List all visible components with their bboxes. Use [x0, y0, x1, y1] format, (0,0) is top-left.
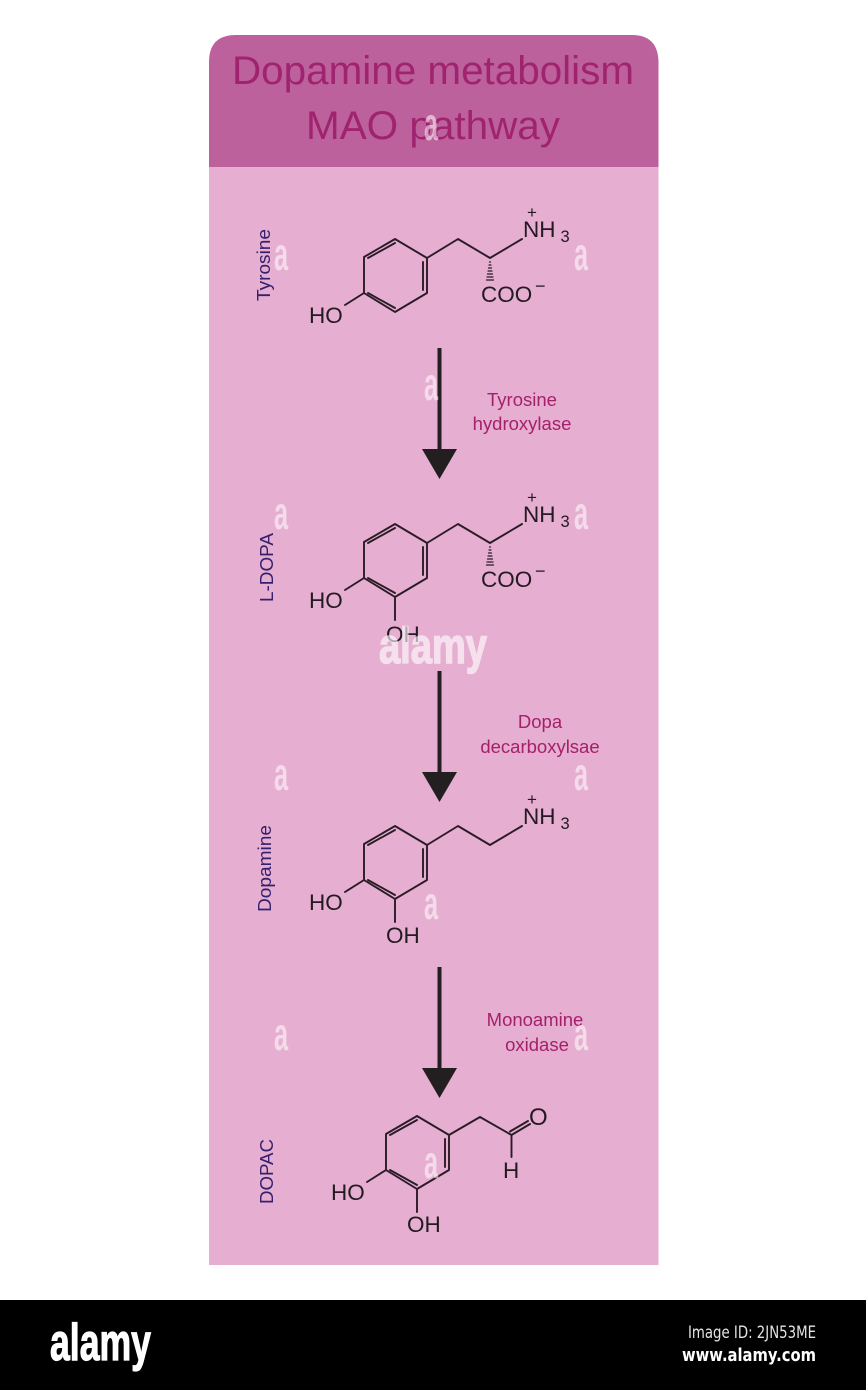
label: L-DOPA: L-DOPA: [256, 532, 277, 602]
footer image id: Image ID: 2JN53ME: [688, 1323, 816, 1343]
arrow 2: [422, 671, 457, 802]
molecule: Tyrosine: +: [527, 203, 537, 222]
enzyme: Monoamine oxidase: [487, 1009, 583, 1055]
watermark marks: a: [274, 748, 288, 800]
molecule: L-DOPA: HO: [309, 588, 343, 613]
molecule: Tyrosine: HO: [309, 303, 343, 328]
molecule: L-DOPA: −: [535, 561, 546, 581]
watermark marks: a: [424, 358, 438, 410]
molecule: L-DOPA: +: [527, 488, 537, 507]
label: Dopamine: Dopamine: [254, 825, 275, 912]
watermark marks: a: [574, 1008, 588, 1060]
header band: [209, 35, 658, 167]
watermark marks: a: [274, 228, 288, 280]
watermark marks: a: [574, 487, 588, 539]
enzyme: Tyrosine hydroxylase: Tyrosine: [487, 389, 557, 410]
enzyme: Tyrosine hydroxylase: hydroxylase: [473, 413, 571, 434]
enzyme: Tyrosine hydroxylase: [473, 389, 571, 434]
arrow 1: [422, 348, 457, 479]
watermark: alamy: alamy: [379, 618, 487, 674]
molecule: L-DOPA: OH: [386, 622, 420, 647]
watermark marks: a: [574, 228, 588, 280]
watermark marks: a: [574, 748, 588, 800]
molecule: Tyrosine: NH: [523, 217, 556, 242]
label: Tyrosine: Tyrosine: [253, 229, 274, 301]
molecule: DOPAC: [331, 1104, 548, 1237]
molecule: Tyrosine: COO: [481, 282, 532, 307]
watermark marks: a: [424, 877, 438, 929]
enzyme: Dopa decarboxylase: decarboxylsae: [480, 736, 600, 757]
enzyme: Monoamine oxidase: Monoamine: [487, 1009, 583, 1030]
molecule: Tyrosine: [309, 203, 570, 328]
molecule: Tyrosine: 3: [560, 228, 570, 246]
molecule: Dopamine: +: [527, 790, 537, 809]
watermark marks: [274, 98, 588, 1188]
molecule: DOPAC: OH: [407, 1212, 441, 1237]
molecule: DOPAC: HO: [331, 1180, 365, 1205]
watermark marks: a: [274, 487, 288, 539]
footer url: www.alamy.com: [682, 1345, 816, 1366]
molecule: Dopamine: HO: [309, 890, 343, 915]
arrow 3: [422, 967, 457, 1098]
molecule: L-DOPA: NH: [523, 502, 556, 527]
molecule: L-DOPA: [309, 488, 570, 647]
title: [232, 49, 634, 148]
molecule: L-DOPA: COO: [481, 567, 532, 592]
panel: pink background: [209, 160, 658, 1265]
molecule: Dopamine: OH: [386, 923, 420, 948]
footer logo: alamy: [50, 1314, 151, 1372]
molecule: DOPAC: O: [529, 1104, 548, 1131]
watermark marks: a: [424, 98, 438, 150]
molecule: L-DOPA: 3: [560, 513, 570, 531]
label: DOPAC: DOPAC: [256, 1139, 277, 1204]
molecule: Dopamine: [309, 790, 570, 948]
molecule: Dopamine: 3: [560, 815, 570, 833]
molecule: DOPAC: H: [503, 1158, 519, 1183]
enzyme: Dopa decarboxylase: [480, 711, 600, 757]
enzyme: Monoamine oxidase: oxidase: [505, 1034, 569, 1055]
title: Dopamine metabolism: [232, 49, 634, 93]
enzyme: Dopa decarboxylase: Dopa: [518, 711, 563, 732]
molecule: Dopamine: NH: [523, 804, 556, 829]
molecule: Tyrosine: −: [535, 276, 546, 296]
title: MAO pathway: [306, 104, 560, 148]
watermark marks: a: [274, 1008, 288, 1060]
footer bar: [0, 1300, 866, 1390]
watermark marks: a: [424, 1136, 438, 1188]
